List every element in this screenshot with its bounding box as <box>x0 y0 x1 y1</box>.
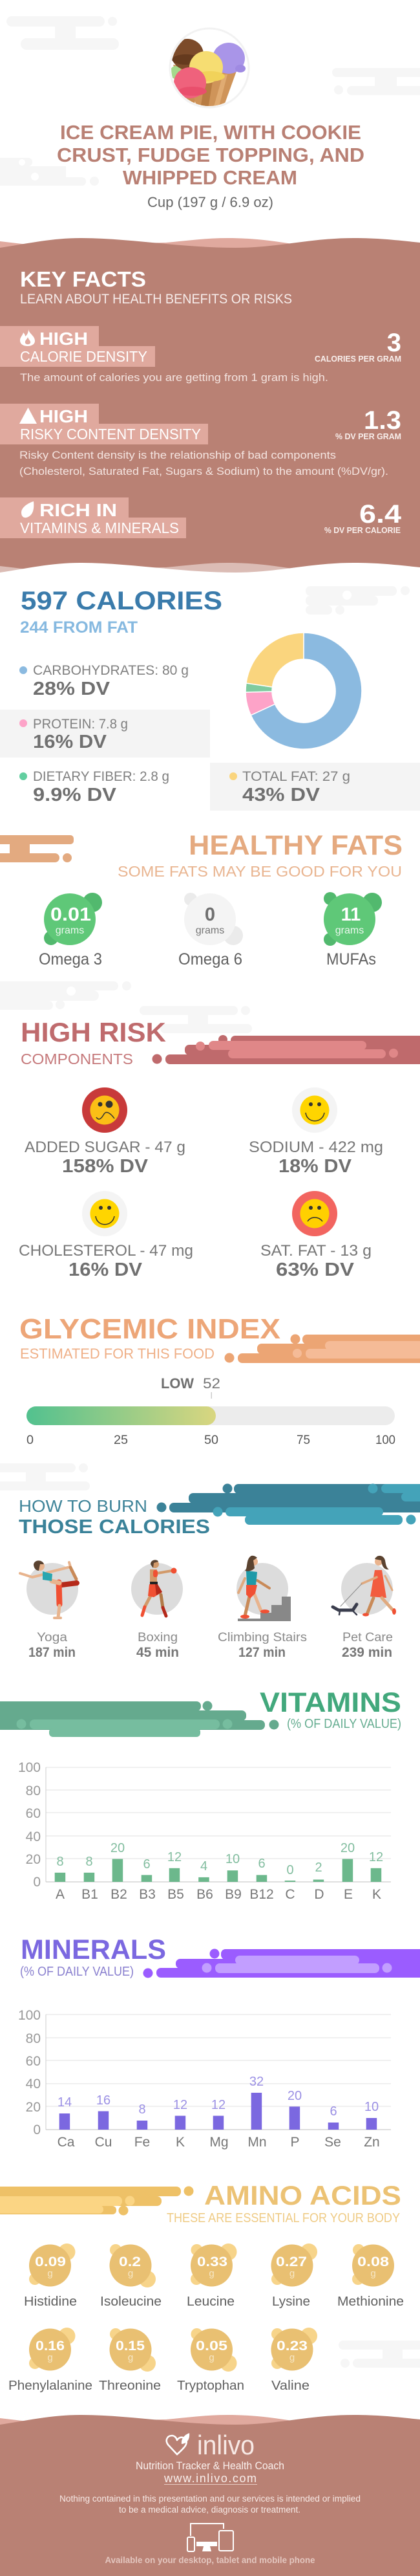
bar chart: vitamins: B5 <box>167 1887 184 1902</box>
disclaimer <box>59 2494 361 2515</box>
glycemic index gauge: 25 <box>114 1434 128 1447</box>
amino acid: lysine <box>271 2243 317 2309</box>
bar chart: vitamins: B1 <box>81 1887 98 1902</box>
bar chart: vitamins: 20 <box>341 1841 355 1855</box>
bar chart: vitamins: 10 <box>226 1852 240 1866</box>
amino acid: tryptophan: 0.05 <box>196 2339 227 2353</box>
legend: total fat: 43% DV <box>242 785 320 805</box>
bar chart: minerals: Se <box>324 2135 341 2150</box>
bar chart: vitamins: 6 <box>143 1857 151 1872</box>
amino acid: histidine: g <box>47 2268 53 2279</box>
amino acid: histidine <box>24 2243 77 2309</box>
logo: inlivo: inlivo <box>197 2430 255 2460</box>
legend: protein <box>0 710 210 758</box>
bar chart: vitamins: E <box>344 1887 353 1902</box>
heading: high risk: HIGH RISK <box>21 1017 166 1047</box>
labels: activities: Pet Care <box>342 1631 393 1644</box>
amino acid: valine: 0.23 <box>277 2339 308 2353</box>
bar chart: vitamins: C <box>285 1887 295 1902</box>
subheading: glycemic index: ESTIMATED FOR THIS FOOD <box>20 1346 215 1362</box>
bar chart: vitamins: D <box>314 1887 324 1902</box>
labels: activities <box>28 1631 393 1660</box>
fact: calorie density: 3 <box>387 329 401 357</box>
title <box>57 121 364 189</box>
icon: warning triangle <box>19 408 37 424</box>
legend: carbohydrates: CARBOHYDRATES: 80 g <box>33 663 189 678</box>
bar chart: minerals: K <box>176 2135 185 2150</box>
fact: risky content density <box>0 404 401 477</box>
labels: activities: 127 min <box>238 1645 286 1660</box>
fact: calorie density: CALORIE DENSITY <box>20 348 147 365</box>
subheading: calories from fat: 244 FROM FAT <box>20 618 138 637</box>
bar chart: vitamins: A <box>56 1887 65 1902</box>
amino acid: isoleucine: g <box>128 2268 133 2279</box>
amino acid: leucine: 0.33 <box>197 2254 227 2269</box>
heading: glycemic index: GLYCEMIC INDEX <box>19 1313 280 1345</box>
glycemic index gauge: 0 <box>26 1434 34 1447</box>
fact: rich in vitamins and minerals: VITAMINS & MINERALS <box>20 519 179 536</box>
amino acid: leucine <box>187 2243 236 2309</box>
fact: calorie density: CALORIES PER GRAM <box>315 354 401 364</box>
heading: how to burn those calories <box>19 1496 210 1538</box>
bar chart: vitamins: B2 <box>110 1887 127 1902</box>
fat: omega 6: grams <box>196 925 224 936</box>
bar chart: minerals: Ca <box>58 2135 75 2150</box>
labels: activities: Boxing <box>138 1631 178 1644</box>
disclaimer: to be a medical advice, diagnosis or treatment. <box>119 2505 300 2515</box>
bar chart: vitamins: 2 <box>315 1861 322 1875</box>
risk: added sugar: ADDED SUGAR - 47 g <box>25 1139 185 1156</box>
bar chart: vitamins: K <box>372 1887 381 1902</box>
risk: sodium <box>249 1087 383 1177</box>
fat: omega 6 <box>178 893 243 968</box>
subheading: vitamins: (% OF DAILY VALUE) <box>287 1717 401 1731</box>
amino acid: threonine: g <box>128 2352 133 2363</box>
fat: MUFAs: grams <box>335 925 364 936</box>
title: CRUST, FUDGE TOPPING, AND <box>57 144 364 166</box>
legend: total fat <box>210 763 420 811</box>
bar chart: vitamins: 100 <box>18 1760 41 1775</box>
amino acid: isoleucine: Isoleucine <box>100 2295 162 2309</box>
icon: devices <box>187 2524 233 2551</box>
bar chart: minerals: 80 <box>26 2031 41 2046</box>
bar chart: minerals: 20 <box>288 2089 302 2103</box>
risk: sodium: SODIUM - 422 mg <box>249 1139 383 1156</box>
amino acid: phenylalanine <box>8 2328 92 2393</box>
bar chart: minerals: 20 <box>26 2100 41 2115</box>
bar chart: vitamins: 0 <box>33 1875 41 1890</box>
risk: saturated fat <box>260 1191 372 1280</box>
amino acid: threonine: Threonine <box>99 2379 161 2393</box>
icon: flame <box>20 329 35 346</box>
amino acid: threonine: 0.15 <box>116 2339 145 2353</box>
bar chart: minerals: Mn <box>247 2135 267 2150</box>
bar chart: minerals <box>18 2008 391 2150</box>
fat: omega 3: 0.01 <box>50 904 91 925</box>
bar chart: vitamins: B12 <box>249 1887 274 1902</box>
glycemic index gauge: 100 <box>375 1434 395 1447</box>
legend: protein: 16% DV <box>33 732 107 752</box>
heading: how to burn those calories: THOSE CALORIES <box>19 1515 210 1538</box>
subheading: key facts: LEARN ABOUT HEALTH BENEFITS OR RISKS <box>20 292 292 307</box>
legend: carbohydrates <box>19 663 189 699</box>
bar chart: vitamins: 12 <box>167 1850 182 1864</box>
bar chart: minerals: 12 <box>173 2098 187 2112</box>
bar chart: minerals: 100 <box>18 2008 41 2023</box>
fat: omega 6: Omega 6 <box>178 950 242 968</box>
title: WHIPPED CREAM <box>123 166 297 189</box>
risk: cholesterol: 16% DV <box>68 1260 143 1280</box>
amino acid: histidine: 0.09 <box>35 2254 66 2269</box>
risk: saturated fat: SAT. FAT - 13 g <box>260 1242 372 1260</box>
fat: omega 3: Omega 3 <box>39 950 102 968</box>
fat: MUFAs <box>324 892 382 968</box>
bar chart: minerals: P <box>290 2135 300 2150</box>
disclaimer: Nothing contained in this presentation and our services is intended or implied <box>59 2494 361 2504</box>
amino acid: isoleucine: 0.2 <box>119 2254 141 2269</box>
amino acid: threonine <box>99 2328 161 2393</box>
glycemic index gauge: LOW <box>161 1375 194 1392</box>
bar chart: minerals: 16 <box>96 2093 110 2108</box>
labels: activities: Climbing Stairs <box>218 1631 307 1644</box>
icon: leaf <box>21 501 34 518</box>
donut chart <box>246 633 362 749</box>
fact: risky content density: HIGH <box>39 406 88 426</box>
fact: rich in vitamins and minerals: % DV PER CALORIE <box>324 525 401 535</box>
fact: risky content density: % DV PER GRAM <box>335 431 401 441</box>
availability note: Available on your desktop, tablet and mobile phone <box>105 2555 315 2565</box>
glycemic index gauge: 52 <box>203 1375 220 1392</box>
fat: omega 3: grams <box>56 925 84 936</box>
fact: risky content density: (Cholesterol, Saturated Fat, Sugars & Sodium) to the amount (%DV/gr). <box>19 465 388 477</box>
bar chart: minerals: 40 <box>26 2077 41 2091</box>
bar chart: vitamins: 12 <box>369 1850 383 1864</box>
panel: key facts <box>0 238 420 585</box>
heading: calories: 597 CALORIES <box>21 587 222 615</box>
legend: carbohydrates: 28% DV <box>33 679 110 699</box>
bar chart: minerals: 10 <box>364 2100 379 2114</box>
amino acid: methionine: g <box>370 2268 376 2279</box>
bar chart: vitamins: 8 <box>85 1855 93 1869</box>
bar chart: minerals: Fe <box>134 2135 150 2150</box>
fat: omega 6: 0 <box>205 904 215 925</box>
bar chart: vitamins: B3 <box>139 1887 156 1902</box>
fat: omega 3 <box>39 893 102 968</box>
bar chart: minerals: Zn <box>364 2135 380 2150</box>
bar chart: vitamins: 0 <box>286 1863 294 1877</box>
bar chart: minerals: 60 <box>26 2054 41 2069</box>
bar chart: vitamins: B6 <box>196 1887 213 1902</box>
fact: risky content density: RISKY CONTENT DENSITY <box>20 426 201 442</box>
amino acid: leucine: g <box>209 2268 215 2279</box>
fact: risky content density: 1.3 <box>364 406 401 435</box>
bar chart: vitamins <box>18 1760 391 1902</box>
bar chart: minerals: 14 <box>58 2095 72 2110</box>
labels: activities: 45 min <box>136 1645 179 1660</box>
fact: rich in vitamins and minerals <box>0 497 402 538</box>
fact: calorie density: The amount of calories you are getting from 1 gram is high. <box>20 371 328 384</box>
labels: activities: 239 min <box>342 1645 392 1660</box>
legend: dietary fiber: DIETARY FIBER: 2.8 g <box>33 769 169 784</box>
fact: calorie density <box>0 326 401 384</box>
fact: rich in vitamins and minerals: 6.4 <box>359 500 402 529</box>
risk: sodium: 18% DV <box>278 1156 352 1177</box>
amino acid: valine: Valine <box>271 2379 310 2393</box>
bar chart: vitamins: 60 <box>26 1806 41 1821</box>
amino acid: tryptophan <box>177 2328 244 2393</box>
amino acid: methionine: 0.08 <box>357 2254 389 2269</box>
legend: dietary fiber <box>19 769 169 805</box>
risk: added sugar <box>25 1087 185 1177</box>
amino acid: isoleucine <box>100 2244 162 2309</box>
amino acid: valine: g <box>289 2352 295 2363</box>
bar chart: minerals: Mg <box>209 2135 229 2150</box>
fact: rich in vitamins and minerals: RICH IN <box>39 500 117 520</box>
amino acid: lysine: g <box>289 2268 295 2279</box>
amino acid: valine <box>271 2328 317 2393</box>
risk: added sugar: 158% DV <box>62 1156 149 1177</box>
legend: total fat: TOTAL FAT: 27 g <box>242 769 350 784</box>
bar chart: vitamins: 6 <box>258 1857 266 1871</box>
title: ICE CREAM PIE, WITH COOKIE <box>60 121 361 144</box>
subheading: components: COMPONENTS <box>21 1051 133 1067</box>
amino acid: tryptophan: g <box>209 2352 215 2363</box>
panel: footer <box>0 2415 420 2576</box>
risk: cholesterol: CHOLESTEROL - 47 mg <box>19 1242 193 1260</box>
glycemic index gauge: 50 <box>204 1434 218 1447</box>
heading: minerals: MINERALS <box>21 1934 166 1965</box>
activity: pet care <box>333 1556 396 1616</box>
glycemic index gauge: 75 <box>297 1434 310 1447</box>
amino acid: phenylalanine: g <box>47 2352 53 2363</box>
bar chart: vitamins: B9 <box>225 1887 242 1902</box>
subheading: amino acids: THESE ARE ESSENTIAL FOR YOUR BODY <box>167 2211 400 2225</box>
heading: healthy fats: HEALTHY FATS <box>189 830 403 861</box>
activity: yoga <box>20 1560 78 1618</box>
risk: cholesterol <box>19 1191 193 1280</box>
heading: key facts: KEY FACTS <box>20 267 146 291</box>
bar chart: vitamins: 4 <box>200 1859 207 1873</box>
website link: www.inlivo.com <box>163 2472 257 2485</box>
amino acid: leucine: Leucine <box>187 2295 235 2309</box>
bar chart: vitamins: 20 <box>26 1852 41 1867</box>
subheading: healthy fats: SOME FATS MAY BE GOOD FOR YOU <box>118 863 402 880</box>
labels: activities: Yoga <box>37 1631 67 1644</box>
fat: MUFAs: MUFAs <box>326 950 376 968</box>
bar chart: vitamins: 80 <box>26 1784 41 1798</box>
amino acid: lysine: 0.27 <box>276 2254 307 2269</box>
bar chart: minerals: 6 <box>330 2104 337 2119</box>
tagline: Nutrition Tracker & Health Coach <box>136 2460 284 2472</box>
glycemic index gauge <box>26 1375 395 1447</box>
image: ice cream cones <box>170 28 249 109</box>
bar chart: minerals: 0 <box>33 2123 41 2137</box>
fact: risky content density: Risky Content density is the relationship of bad components <box>19 449 336 461</box>
activity: boxing <box>131 1560 183 1616</box>
fact: calorie density: HIGH <box>39 329 88 349</box>
bar chart: minerals: 12 <box>211 2098 226 2112</box>
amino acid: phenylalanine: 0.16 <box>36 2339 65 2353</box>
risk: saturated fat: 63% DV <box>276 1260 355 1280</box>
legend: dietary fiber: 9.9% DV <box>33 785 117 805</box>
amino acid: histidine: Histidine <box>24 2295 77 2309</box>
bar chart: vitamins: 20 <box>110 1841 125 1855</box>
bar chart: vitamins: 8 <box>56 1855 64 1869</box>
bar chart: minerals: 8 <box>138 2102 146 2117</box>
heading: amino acids: AMINO ACIDS <box>204 2180 401 2210</box>
heading: how to burn those calories: HOW TO BURN <box>19 1496 147 1516</box>
heading: vitamins: VITAMINS <box>260 1687 401 1718</box>
bar chart: vitamins: 40 <box>26 1829 41 1844</box>
logo: inlivo <box>167 2430 255 2460</box>
labels: activities: 187 min <box>28 1645 76 1660</box>
amino acid: methionine <box>337 2244 404 2309</box>
legend: protein: PROTEIN: 7.8 g <box>33 717 128 732</box>
subheading: minerals: (% OF DAILY VALUE) <box>20 1965 134 1979</box>
amino acid: phenylalanine: Phenylalanine <box>8 2379 92 2393</box>
bar chart: minerals: 32 <box>249 2075 264 2089</box>
amino acid: lysine: Lysine <box>272 2295 310 2309</box>
amino acid: tryptophan: Tryptophan <box>177 2379 244 2393</box>
fat: MUFAs: 11 <box>341 904 361 925</box>
serving size: Cup (197 g / 6.9 oz) <box>147 194 273 210</box>
bar chart: minerals: Cu <box>95 2135 112 2150</box>
activity: climbing stairs <box>236 1556 291 1621</box>
amino acid: methionine: Methionine <box>337 2295 404 2309</box>
